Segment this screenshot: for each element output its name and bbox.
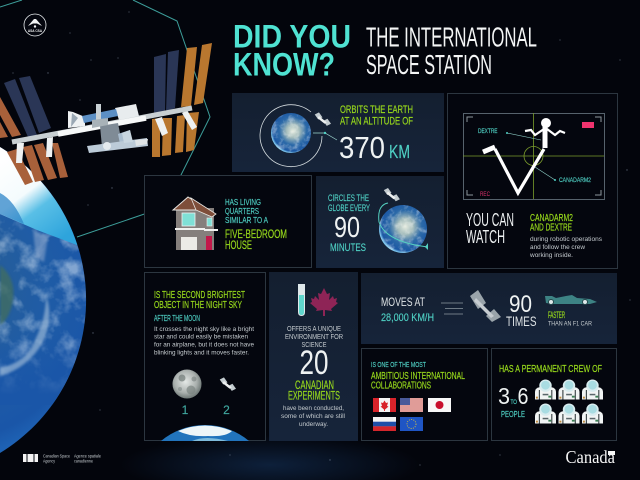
space station illustration xyxy=(0,43,212,185)
text: circles the globe every xyxy=(328,193,370,214)
footer: Canadian Space Agency signature: canadienne xyxy=(74,458,93,464)
text: have been conducted: underway. xyxy=(299,421,328,428)
labels 1 and 2: 2 xyxy=(223,403,230,417)
text: orbits the earth: ORBITS THE EARTH xyxy=(340,104,413,116)
labels 1 and 2 xyxy=(182,403,230,417)
footer: Canadian Space Agency signature: Agence spatiale xyxy=(74,454,101,458)
truss xyxy=(12,108,192,142)
dextre robot xyxy=(525,118,565,148)
logo: Canadian Space Agency emblem xyxy=(24,14,46,36)
panel: second brightest object xyxy=(144,272,266,441)
solar arrays: left blue xyxy=(4,76,51,137)
text: has living quarters: SIMILAR TO A xyxy=(225,215,268,225)
text: faster than an f1 car: FASTER xyxy=(548,310,565,320)
flag: United States xyxy=(400,398,423,412)
panel: speed xyxy=(361,273,617,344)
text: offers a unique environment: ENVIRONMENT FOR xyxy=(285,332,343,341)
text: have been conducted xyxy=(281,405,345,428)
text: has living quarters: HAS LIVING xyxy=(225,197,261,207)
text: second brightest: AFTER THE MOON xyxy=(154,313,200,323)
number: 20 canadian experiments: 20 xyxy=(300,344,328,382)
text: orbits the earth: AT AN ALTITUDE OF xyxy=(340,116,413,128)
title: did you know: DID YOU xyxy=(233,18,351,54)
text: ambitious: COLLABORATIONS xyxy=(371,380,431,392)
icon: space station grey xyxy=(470,290,501,322)
icon: maple leaf xyxy=(310,288,338,316)
text: ambitious: AMBITIOUS INTERNATIONAL xyxy=(371,371,465,382)
number: 90 times: 90 xyxy=(509,291,532,318)
text: canadarm2 and dextre: working inside. xyxy=(529,252,573,259)
number: 90 minutes: MINUTES xyxy=(330,242,366,254)
text: canadarm2 and dextre xyxy=(529,212,603,259)
number: 370 km: 370 xyxy=(339,130,385,165)
icon: earth with orbit arrow xyxy=(379,188,428,253)
number: 20 canadian experiments: CANADIAN xyxy=(295,378,334,392)
text: faster than an f1 car: THAN AN F1 CAR xyxy=(548,320,592,328)
panel: international collaborations xyxy=(362,348,488,440)
panel: circles the globe xyxy=(316,176,444,268)
planet earth, large xyxy=(0,147,86,453)
text: description: star and could easily be mistaken xyxy=(154,334,248,340)
text: moves at: 28,000 KM/H xyxy=(381,312,434,324)
text: offers a unique environment xyxy=(285,324,343,349)
text: description: for an airplane, but it does not have xyxy=(154,342,254,348)
radiators xyxy=(16,110,197,163)
text: circles the globe every: CIRCLES THE xyxy=(328,193,369,204)
icon: speed lines xyxy=(441,303,463,314)
solar arrays: right orange xyxy=(152,43,212,157)
text: second brightest xyxy=(154,289,245,323)
text: has a permanent crew of: HAS A PERMANENT CREW OF xyxy=(499,364,602,375)
number: 3 to 6 people: TO xyxy=(510,400,517,406)
text: ambitious xyxy=(371,360,465,392)
text: have been conducted: some of which are still xyxy=(281,413,345,420)
number: 3 to 6 people: 6 xyxy=(518,383,528,409)
footer: Canada wordmark: Canada xyxy=(566,447,615,467)
number: 90 minutes: 90 xyxy=(334,212,360,244)
text: canadarm2 and dextre: CANADARM2 xyxy=(530,212,573,224)
icon: house xyxy=(173,197,218,250)
text: description: blinking lights and it moves faster. xyxy=(154,350,249,356)
text: moves at xyxy=(381,295,434,324)
text: has living quarters: HOUSE xyxy=(225,238,252,252)
text: description xyxy=(154,326,254,356)
text: you can watch: YOU CAN xyxy=(466,210,514,230)
camera view: DEXTRE xyxy=(478,128,498,135)
text: circles the globe every: GLOBE EVERY xyxy=(328,203,370,214)
hexagonal frame line xyxy=(0,0,210,237)
footer: Canadian Space Agency signature: Agency xyxy=(43,458,56,464)
camera view: REC xyxy=(480,191,490,198)
text: has living quarters: QUARTERS xyxy=(225,206,259,216)
icon: f1 car xyxy=(545,295,597,304)
icon: space station xyxy=(220,377,236,391)
number: 90 minutes xyxy=(330,212,366,254)
text: canadarm2 and dextre: during robotic operations xyxy=(530,236,603,243)
text: canadarm2 and dextre: AND DEXTRE xyxy=(530,222,572,234)
solar arrays: left orange xyxy=(0,97,68,185)
text: offers a unique environment: OFFERS A UNIQUE xyxy=(287,324,341,333)
panel: orbit altitude xyxy=(232,93,444,172)
icon: earth horizon xyxy=(161,425,249,441)
icon: moon xyxy=(172,370,202,398)
flag: Russia xyxy=(373,417,396,431)
camera view xyxy=(463,113,604,200)
title: the international space station: SPACE STATION xyxy=(366,49,492,80)
text: second brightest: OBJECT IN THE NIGHT SKY xyxy=(154,299,242,311)
text: has living quarters xyxy=(225,197,287,252)
number: 3 to 6 people xyxy=(498,383,528,419)
panel: living quarters xyxy=(144,176,312,268)
logo: Canadian Space Agency emblem: ASA CSA xyxy=(28,29,43,33)
icon: test tube xyxy=(298,284,305,316)
text: has living quarters: FIVE-BEDROOM xyxy=(225,227,287,241)
panel: canadarm2 and dextre xyxy=(448,94,618,268)
flag: European Union xyxy=(400,417,423,431)
text: second brightest: IS THE SECOND BRIGHTEST xyxy=(154,289,245,301)
number: 20 canadian experiments: EXPERIMENTS xyxy=(288,388,340,402)
robot arm xyxy=(495,149,544,193)
text: canadarm2 and dextre: and follow the crew xyxy=(530,244,585,251)
text: orbits the earth xyxy=(340,104,413,128)
text: you can watch: WATCH xyxy=(466,227,505,247)
number: 3 to 6 people: 3 xyxy=(498,383,510,409)
text: have been conducted: have been conducted, xyxy=(283,405,344,412)
icon: earth with orbit xyxy=(260,105,337,167)
solar arrays: right upper blue xyxy=(154,50,179,113)
number: 370 km: KM xyxy=(389,142,410,162)
text: description: It crosses the night sky like a bright xyxy=(154,326,254,333)
text: offers a unique environment: SCIENCE xyxy=(302,340,326,349)
camera view: CANADARM2 xyxy=(559,177,591,184)
flag: Canada xyxy=(373,398,396,412)
panel: science xyxy=(269,272,358,441)
title: the international space station: THE INTERNATIONAL xyxy=(366,22,537,52)
text: moves at: MOVES AT xyxy=(381,295,425,309)
text: you can watch xyxy=(466,210,514,247)
number: 3 to 6 people: PEOPLE xyxy=(501,409,525,419)
labels 1 and 2: 1 xyxy=(182,403,189,417)
title: did you know: KNOW? xyxy=(233,46,335,82)
flag: Japan xyxy=(428,398,451,412)
number: 20 canadian experiments xyxy=(288,344,340,402)
title: did you know xyxy=(233,18,351,82)
number: 90 times: TIMES xyxy=(506,313,536,329)
title: the international space station xyxy=(366,22,537,80)
footer: Canadian Space Agency signature: Canadian Space xyxy=(43,454,70,458)
icon: astronauts xyxy=(535,379,603,424)
modules xyxy=(68,104,148,153)
text: ambitious: IS ONE OF THE MOST xyxy=(371,360,426,369)
number: 90 times xyxy=(506,291,536,329)
footer: Canadian Space Agency signature xyxy=(23,454,101,464)
panel: permanent crew xyxy=(492,348,616,440)
text: faster than an f1 car xyxy=(548,310,592,328)
